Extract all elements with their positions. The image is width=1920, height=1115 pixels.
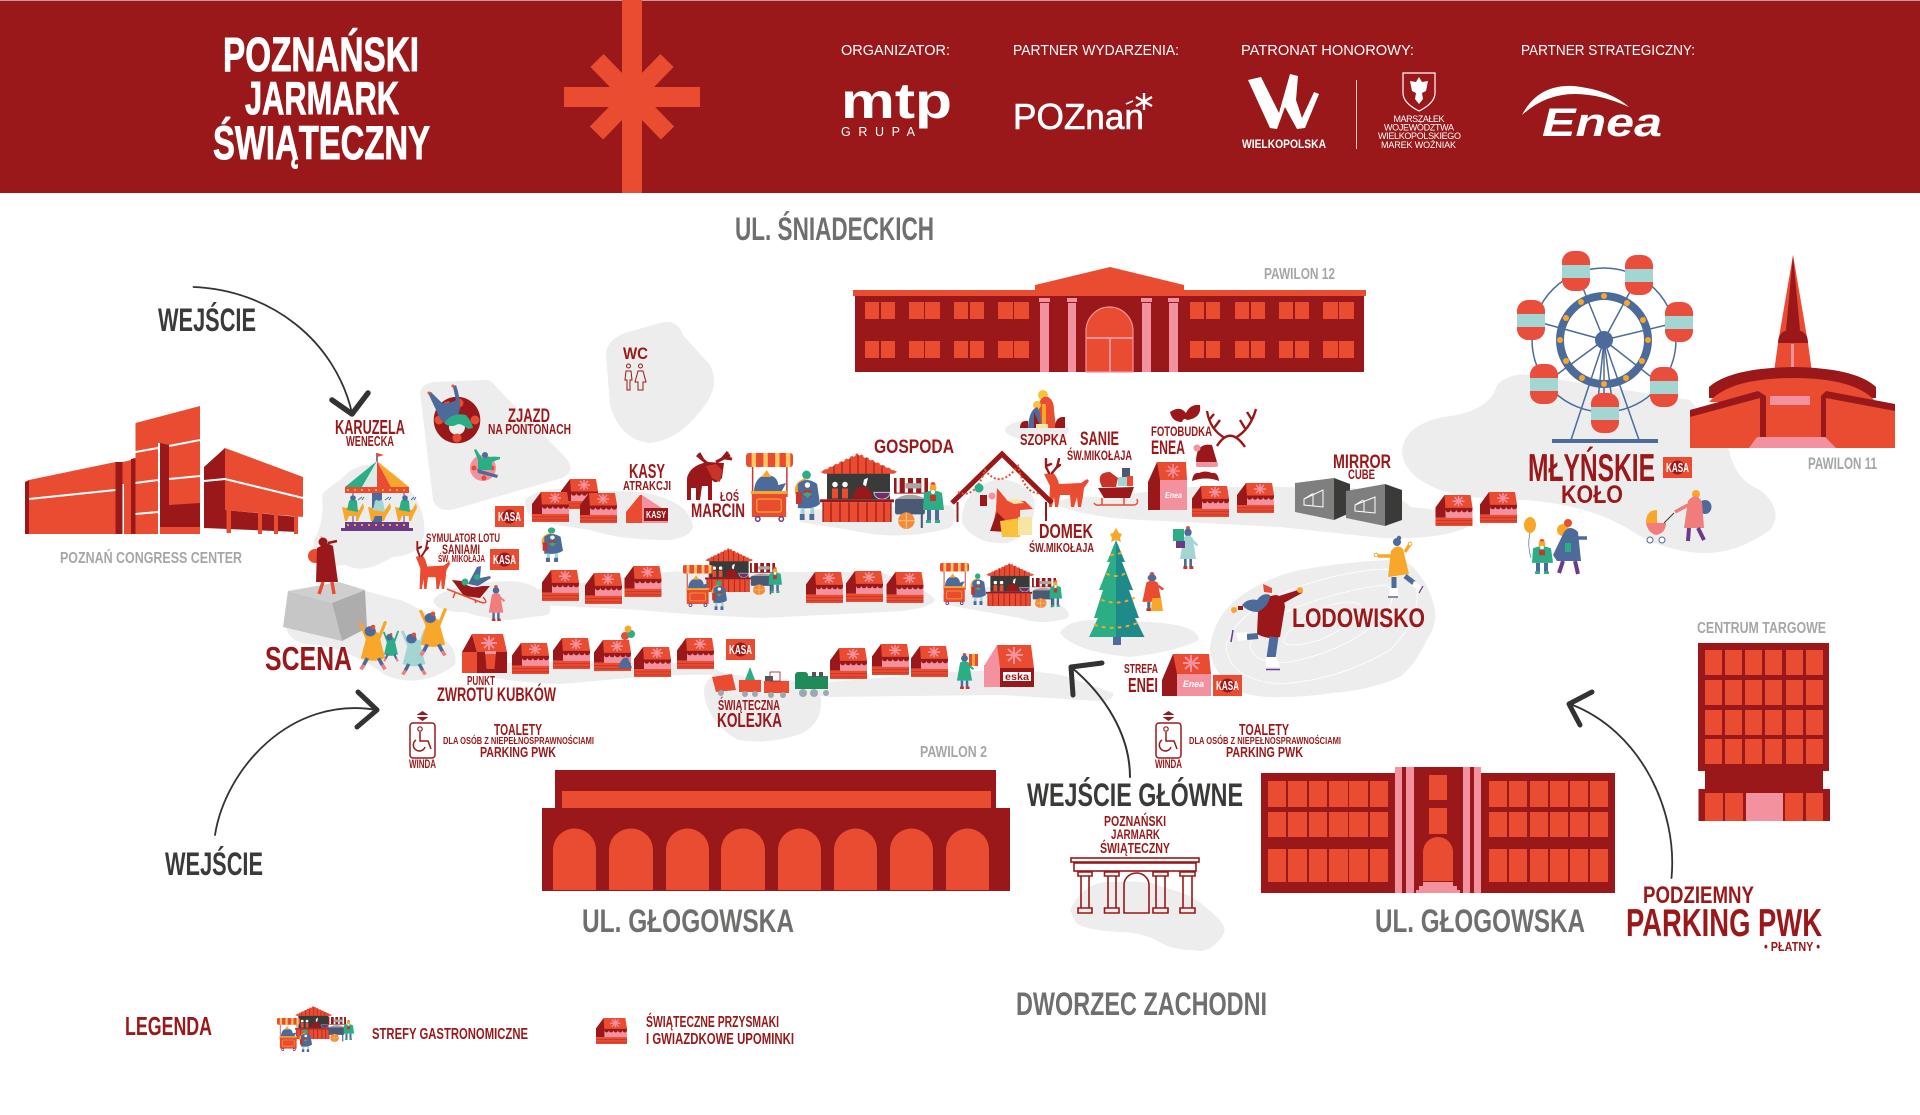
ice rink	[1210, 560, 1435, 697]
kasa badge 5: KASA	[1666, 460, 1689, 475]
label: wejście bottom: WEJŚCIE	[165, 846, 263, 882]
icon: person with presents	[957, 653, 978, 689]
stalls row 1 left	[532, 479, 617, 523]
label: punkt zwrotu kubków	[437, 673, 556, 706]
tree star	[1110, 528, 1122, 542]
label: wejście główne: WEJŚCIE GŁÓWNE	[1027, 777, 1243, 813]
label: młyńskie koło: MŁYŃSKIE	[1528, 446, 1655, 490]
legend text: przysmaki: I GWIAZDKOWE UPOMINKI	[646, 1031, 794, 1048]
label: pawilon 2: PAWILON 2	[920, 744, 987, 761]
kasa badge 3	[726, 639, 755, 660]
label: szopka: SZOPKA	[1020, 432, 1067, 449]
title: POZNAŃSKI	[223, 28, 419, 82]
ferris wheel cabins	[1517, 251, 1693, 433]
kasa badge 4	[1213, 675, 1242, 696]
christmas tree	[1089, 528, 1144, 645]
icon: balloons child	[618, 626, 635, 668]
icon: pink person	[489, 585, 504, 621]
label: łoś marcin	[691, 489, 745, 522]
logo: mtp grupa: GRUPA	[841, 125, 916, 139]
label: toalety parking left: PARKING PWK	[480, 744, 556, 761]
stalls row 1 right	[1192, 483, 1517, 526]
stage	[283, 582, 367, 641]
pawilon 12	[853, 267, 1366, 372]
gastro zone 2	[683, 548, 782, 610]
label: domek św. mikołaja: DOMEK	[1039, 521, 1093, 543]
label: sanie św. mikołaja: SANIE	[1080, 429, 1119, 450]
pawilon 11	[1690, 255, 1895, 448]
wc area: WC	[623, 344, 648, 363]
street labels	[582, 211, 1585, 1022]
legend icon: gastro	[277, 1006, 354, 1052]
icon: person with gift	[1173, 526, 1197, 569]
yellow skater	[1374, 536, 1423, 597]
pawilon 2	[542, 770, 1010, 891]
icon: person with yellow scarf	[542, 527, 563, 562]
label: strefa enei: STREFA	[1124, 661, 1158, 676]
label: punkt zwrotu kubków: ZWROTU KUBKÓW	[437, 684, 556, 706]
label: karuzela wenecka: WENECKA	[346, 434, 394, 450]
label: młyńskie koło: KOŁO	[1561, 481, 1623, 509]
icon: person in red coat	[1142, 572, 1163, 611]
label: sanie św. mikołaja: ŚW.MIKOŁAJA	[1067, 446, 1132, 463]
logo: mtp grupa: mtp	[841, 73, 952, 129]
ferris wheel	[1517, 251, 1693, 443]
kasa badge 5	[1663, 457, 1692, 478]
kasa badge 2	[490, 549, 519, 570]
label: fotobudka enea: FOTOBUDKA	[1151, 424, 1212, 439]
icon: mirror cubes	[1295, 478, 1402, 526]
label: toalety parking left	[443, 722, 594, 761]
legend text: strefy: STREFY GASTRONOMICZNE	[372, 1026, 528, 1043]
icon: moose marcin	[687, 452, 732, 500]
label: świąteczna kolejka: KOLEJKA	[717, 710, 782, 732]
label: mirror cube: CUBE	[1348, 466, 1375, 482]
fotobudka props	[1170, 405, 1256, 481]
label: gate title: ŚWIĄTECZNY	[1100, 839, 1170, 857]
street labels: UL. GŁOGOWSKA	[582, 903, 794, 939]
arrow: top-left entrance	[194, 287, 368, 414]
arrow: main entrance	[1071, 663, 1130, 777]
sponsor headings: PATRONAT HONOROWY:	[1241, 43, 1414, 59]
logo: enea	[1522, 86, 1662, 145]
label: mirror cube	[1333, 452, 1391, 482]
logo: marszalek crest: WIELKOPOLSKIEGO	[1378, 131, 1461, 141]
title: ŚWIĄTECZNY	[213, 116, 430, 169]
label: toalety parking right: DLA OSÓB Z NIEPEŁNOSPRAWNOŚCIAMI	[1189, 734, 1341, 747]
label: lodowisko: LODOWISKO	[1292, 603, 1425, 633]
icon: big tube rider	[428, 384, 480, 443]
christmas train	[712, 667, 829, 698]
logo: poznan: POZnan	[1013, 96, 1144, 137]
wc area	[623, 344, 648, 390]
label: zjazd na pontonach: ZJAZD	[508, 406, 550, 427]
label: wejście top: WEJŚCIE	[158, 302, 256, 338]
icon: balloon and child	[1524, 517, 1553, 574]
icon: sleigh with rider	[447, 566, 491, 603]
street labels: UL. ŚNIADECKICH	[735, 211, 934, 247]
label: kasy atrakcji: KASY	[629, 461, 665, 483]
label: congress center: POZNAŃ CONGRESS CENTER	[60, 548, 242, 567]
enea big booth: Enea	[1165, 491, 1182, 500]
label: zjazd na pontonach	[488, 406, 571, 438]
ground walkway blobs	[286, 322, 1776, 951]
label: podziemny parking: PARKING PWK	[1626, 902, 1822, 945]
enei booth: Enea	[1183, 679, 1204, 689]
label: strefa enei	[1124, 661, 1158, 697]
label: podziemny parking: PODZIEMNY	[1643, 882, 1754, 909]
label: toalety parking left: TOALETY	[494, 722, 542, 739]
carousel	[341, 453, 417, 531]
logo: marszalek crest: WOJEWÓDZTWA	[1384, 122, 1454, 132]
kasa badge 4: KASA	[1216, 678, 1239, 693]
label: gospoda: GOSPODA	[874, 437, 954, 458]
logo: marszalek crest	[1378, 73, 1461, 150]
legend title: LEGENDA	[125, 1011, 212, 1041]
label: gate title: POZNAŃSKI	[1104, 813, 1166, 830]
label: strefa enei: ENEI	[1128, 675, 1158, 697]
label: łoś marcin: MARCIN	[691, 501, 745, 522]
kasa badge 3: KASA	[729, 642, 752, 657]
stalls row 2	[542, 566, 924, 604]
label: sanie św. mikołaja	[1067, 429, 1132, 463]
icon: gift ribbon bow	[564, 0, 700, 193]
icon: woman with pram	[1675, 490, 1712, 541]
icon: santa sleigh with sack	[1094, 468, 1138, 505]
label: podziemny parking	[1626, 882, 1822, 954]
label: domek św. mikołaja	[1029, 521, 1094, 555]
label: gate title	[1100, 813, 1170, 857]
icon: reindeer simulator	[416, 542, 450, 589]
title: JARMARK	[245, 72, 399, 124]
icon: reindeer of santa	[1044, 459, 1089, 507]
arrow: lower left	[215, 692, 377, 835]
title	[213, 28, 430, 169]
big skater	[1231, 584, 1303, 670]
street labels: DWORZEC ZACHODNI	[1016, 986, 1267, 1022]
label: toalety parking right: PARKING PWK	[1226, 744, 1303, 761]
kasy booth: KASY	[646, 510, 666, 521]
legend icon: booth	[596, 1018, 627, 1044]
icon: elevator left	[409, 711, 436, 771]
icon: small tube rider	[470, 449, 500, 481]
label: pawilon 11: PAWILON 11	[1808, 454, 1877, 473]
label: świąteczna kolejka: ŚWIĄTECZNA	[718, 696, 780, 714]
icon: santa	[990, 488, 1033, 537]
eska booth: eska	[1005, 672, 1029, 683]
label: świąteczna kolejka	[717, 696, 782, 732]
enei booth	[1162, 654, 1211, 696]
icon: elevator right: WINDA	[1155, 759, 1182, 771]
eska booth	[984, 645, 1034, 687]
sponsor headings: ORGANIZATOR:	[841, 43, 950, 59]
label: gate title: JARMARK	[1111, 827, 1160, 842]
label: kasy atrakcji: ATRAKCJI	[623, 478, 671, 493]
label: łoś marcin: ŁOŚ	[720, 489, 739, 504]
icon: dancing crowd	[361, 610, 445, 675]
label: symulator lotu saniami	[426, 533, 500, 565]
label: mirror cube: MIRROR	[1333, 452, 1391, 473]
kasy booth	[626, 495, 668, 523]
label: centrum targowe: CENTRUM TARGOWE	[1697, 620, 1826, 637]
legend text: przysmaki: ŚWIĄTECZNE PRZYSMAKI	[646, 1013, 779, 1031]
centrum targowe	[1698, 643, 1830, 821]
legend	[125, 1006, 794, 1052]
label: kasy atrakcji	[623, 461, 671, 493]
icon: pram	[1646, 510, 1674, 543]
sponsor headings: PARTNER STRATEGICZNY:	[1521, 43, 1695, 59]
kasa badge 1: KASA	[498, 509, 521, 524]
label: karuzela wenecka: KARUZELA	[335, 417, 405, 439]
cup return booth	[462, 634, 507, 673]
kasa badge 1	[495, 506, 524, 527]
legend text: przysmaki	[646, 1013, 794, 1048]
gastro zone 3	[940, 563, 1062, 608]
icon: szopka nativity	[1020, 390, 1065, 428]
entrance gate	[1071, 858, 1199, 913]
logo: marszalek crest: MAREK WOŹNIAK	[1381, 140, 1456, 150]
label: symulator lotu saniami: SYMULATOR LOTU	[426, 533, 500, 545]
street labels: UL. GŁOGOWSKA	[1375, 903, 1585, 939]
logo: enea: Enea	[1542, 101, 1662, 145]
label: symulator lotu saniami: SANIAMI	[442, 541, 480, 557]
kasa badge 2: KASA	[493, 552, 516, 567]
label: toalety parking left: DLA OSÓB Z NIEPEŁNOSPRAWNOŚCIAMI	[443, 734, 594, 747]
icon: mother	[1553, 519, 1587, 574]
label: fotobudka enea: ENEA	[1151, 438, 1185, 459]
sponsor headings: PARTNER WYDARZENIA:	[1013, 43, 1179, 59]
label: symulator lotu saniami: ŚW. MIKOŁAJA	[438, 552, 485, 565]
pawilon 3 central building	[1261, 767, 1615, 893]
header banner	[0, 0, 1920, 193]
enea big booth	[1148, 462, 1187, 510]
congress center	[25, 406, 303, 534]
icon: elevator right	[1155, 711, 1182, 771]
logo: wielkopolska	[1242, 74, 1326, 151]
label: zjazd na pontonach: NA PONTONACH	[488, 422, 571, 438]
icon: singer on stage	[308, 536, 338, 594]
label: domek św. mikołaja: ŚW.MIKOŁAJA	[1029, 540, 1094, 555]
label: punkt zwrotu kubków: PUNKT	[467, 673, 495, 688]
label: karuzela wenecka	[335, 417, 405, 450]
label: młyńskie koło	[1528, 446, 1655, 509]
label: fotobudka enea	[1151, 424, 1212, 459]
carousel reindeer riders	[342, 495, 417, 521]
label: toalety parking right: TOALETY	[1239, 722, 1289, 739]
gospoda gastro zone	[746, 453, 944, 529]
label: scena: SCENA	[265, 640, 352, 677]
label: podziemny parking: • PŁATNY •	[1764, 939, 1820, 954]
sponsor headings	[841, 43, 1695, 59]
logo: marszalek crest: MARSZAŁEK	[1394, 114, 1444, 124]
logo: wielkopolska: WIELKOPOLSKA	[1242, 137, 1326, 151]
label: pawilon 12: PAWILON 12	[1264, 266, 1335, 283]
stalls row 3	[512, 638, 948, 679]
domek sw mikolaja	[952, 454, 1052, 537]
icon: elevator left: WINDA	[409, 759, 436, 771]
arrow: right parking	[1569, 692, 1672, 878]
label: toalety parking right	[1189, 722, 1341, 761]
